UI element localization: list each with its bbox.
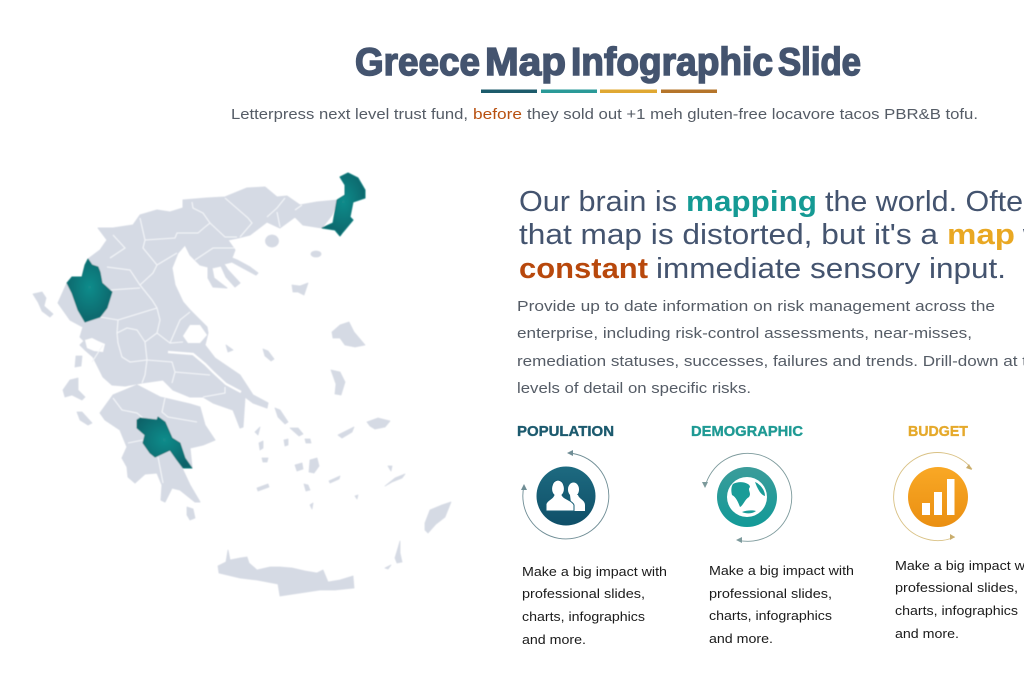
subtitle <box>231 106 978 123</box>
main heading: map <box>947 219 1015 251</box>
demographic label: DEMOGRAPHIC <box>691 424 804 440</box>
demographic caption: charts, infographics <box>709 608 833 623</box>
main heading: constant <box>519 253 648 285</box>
map: highlighted Evros region <box>322 173 365 236</box>
panel: budget <box>894 424 1024 641</box>
population label: POPULATION <box>517 424 614 440</box>
body paragraph: Provide up to date information on risk management across the <box>517 298 995 315</box>
subtitle: before <box>473 106 522 123</box>
subtitle: Letterpress next level trust fund, <box>231 106 468 123</box>
panel: population <box>517 424 667 647</box>
main heading <box>519 186 1024 285</box>
map: highlighted Ioannina region <box>67 259 112 322</box>
population caption: professional slides, <box>522 586 645 601</box>
icon: demographic globe <box>702 453 792 543</box>
body paragraph <box>517 298 1024 397</box>
population caption: and more. <box>522 632 586 647</box>
budget caption: and more. <box>895 626 959 641</box>
map: mainland regions <box>58 187 338 502</box>
main heading: Our brain is <box>519 186 677 218</box>
body paragraph: levels of detail on specific risks. <box>517 380 751 397</box>
title <box>355 41 861 84</box>
population caption <box>522 564 667 647</box>
budget caption <box>895 558 1024 641</box>
budget label: BUDGET <box>908 424 968 440</box>
demographic caption: professional slides, <box>709 586 832 601</box>
population caption: Make a big impact with <box>522 564 667 579</box>
title underline colour bars <box>481 90 717 93</box>
icon: budget bar chart <box>894 453 972 541</box>
main heading: mapping <box>686 186 817 218</box>
demographic caption: and more. <box>709 631 773 646</box>
panel: demographic <box>691 424 854 646</box>
budget caption: professional slides, <box>895 580 1018 595</box>
budget caption: charts, infographics <box>895 603 1019 618</box>
map: region borders <box>92 198 302 483</box>
body paragraph: remediation statuses, successes, failures and trends. Drill-down at t <box>517 353 1024 370</box>
title: Map <box>485 41 566 84</box>
demographic caption: Make a big impact with <box>709 563 854 578</box>
map of Greece <box>33 173 451 596</box>
icon: population people <box>521 450 609 539</box>
subtitle: they sold out +1 meh gluten-free locavore tacos PBR&B tofu. <box>527 106 978 123</box>
budget caption: Make a big impact with <box>895 558 1024 573</box>
map: islands <box>33 235 451 596</box>
map: Euboean channel <box>168 352 241 392</box>
main heading: the world. Often <box>825 186 1024 218</box>
demographic caption <box>709 563 854 646</box>
map: Ambracian and Pagasetic gulfs <box>85 325 207 352</box>
body paragraph: enterprise, including risk-control assessments, near-misses, <box>517 325 972 342</box>
title: Greece <box>355 41 480 84</box>
main heading: immediate sensory input. <box>656 253 1006 285</box>
map: highlighted Arcadia region <box>137 417 192 468</box>
title: Infographic <box>571 41 773 84</box>
title: Slide <box>778 41 861 84</box>
population caption: charts, infographics <box>522 609 646 624</box>
main heading: that map is distorted, but it's a <box>519 219 939 251</box>
